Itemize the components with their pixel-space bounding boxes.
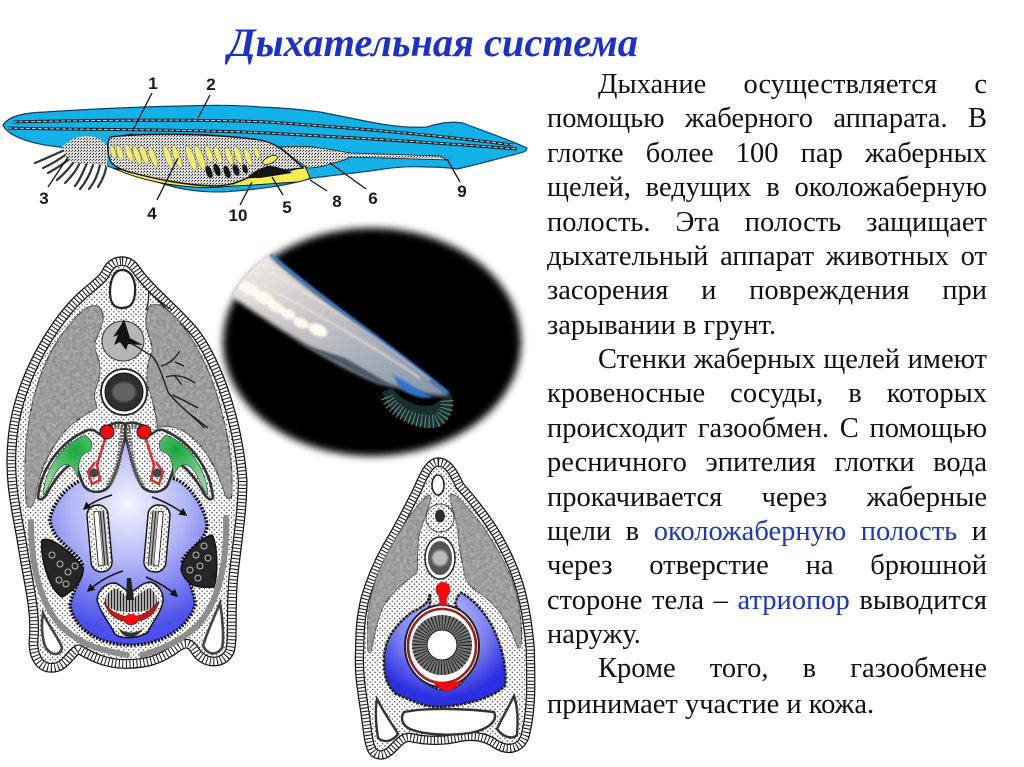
text: second paragraph: ресничного эпителия глотки вода [547,447,987,478]
neural tube [426,504,454,532]
text: first paragraph: дыхательный аппарат животных от [547,241,987,272]
oral tentacles [35,150,107,189]
blue body [3,105,527,192]
text: third paragraph: принимает участие и кожа. [547,689,874,720]
text: third paragraph [547,653,987,720]
text: second paragraph: наружу. [547,619,641,650]
text: second paragraph: через отверстие на брюшной [547,550,987,581]
skin and stippled body [11,261,243,668]
text: third paragraph: Кроме того, в газообмене [598,653,987,684]
text: second paragraph: прокачивается через жаберные [547,482,987,513]
text: second paragraph: стороне тела – атриопор выводится [547,585,987,616]
text: second paragraph [547,344,987,650]
leader lines [48,93,460,205]
gonad follicles [49,543,211,587]
gill slits [108,144,261,171]
text: first paragraph: зарывании в грунт. [547,310,776,341]
text: second paragraph: происходит газообмен. С помощью [547,413,987,444]
myotome muscles [25,304,232,507]
skin and stippled body [359,462,531,755]
oral cirri fan [382,388,452,428]
dark background [223,228,521,456]
figure numbers: 1 [148,74,158,93]
water flow arrows [84,495,186,596]
figure numbers [39,74,467,225]
figure numbers: 6 [368,189,378,208]
nerve cord and notochord [8,120,517,149]
notochord [101,369,147,415]
text: first paragraph: щелей, ведущих в околожаберную [547,172,987,203]
title: Дыхательная система [228,20,638,65]
text: second paragraph: кровеносные сосуды, в которых [547,378,987,409]
lancelet body [215,250,452,398]
pharynx with vessels [405,605,479,687]
neural tube [102,319,144,361]
text: second paragraph: щели в околожаберную полость и [547,516,987,547]
text: first paragraph: глотке более 100 пар жаберных [547,138,987,169]
text: first paragraph: помощью жаберного аппарата. В [547,103,987,134]
myotome muscles [367,494,522,653]
text: first paragraph: засорения и повреждения при [547,275,987,306]
red vessel blobs [431,582,462,691]
small cross-section of lancelet [359,462,531,755]
text: second paragraph: Стенки жаберных щелей имеют [598,344,987,375]
figure numbers: 4 [147,204,157,223]
notochord [425,537,455,579]
metapleural rods [31,518,226,655]
liver and stomach [247,166,292,178]
illustrations [2,78,536,760]
figure numbers: 2 [206,75,216,94]
large cross-section of lancelet [11,261,243,668]
ventral pods [42,603,223,654]
side gonads [42,535,217,597]
dorsal fin chamber [432,475,444,495]
endostyle [97,578,163,638]
text: first paragraph [547,69,987,341]
pharynx bars [86,504,171,573]
nerve branches [125,292,208,428]
figure numbers: 9 [457,182,467,201]
dorsal fin chamber [110,270,135,308]
figure numbers: 8 [332,192,342,211]
intestine [280,146,447,168]
figure numbers: 3 [39,189,49,208]
atrial cavity [384,593,506,707]
photo of lancelet head [215,228,521,456]
atrial cavity [50,433,207,645]
oral hood [62,136,108,167]
lancelet side view diagram [3,74,527,225]
left atrial fold with green gonad and red vessel [38,423,126,499]
figure numbers: 5 [282,198,292,217]
right atrial fold with green gonad and red vessel [125,423,213,499]
ventral band and pods [376,696,518,741]
yellow atrium [110,134,310,187]
text: first paragraph: Дыхание осуществляется с [598,69,987,100]
text: first paragraph: полость. Эта полость защищает [547,207,987,238]
figure numbers: 10 [229,206,247,225]
pharynx [108,134,303,186]
